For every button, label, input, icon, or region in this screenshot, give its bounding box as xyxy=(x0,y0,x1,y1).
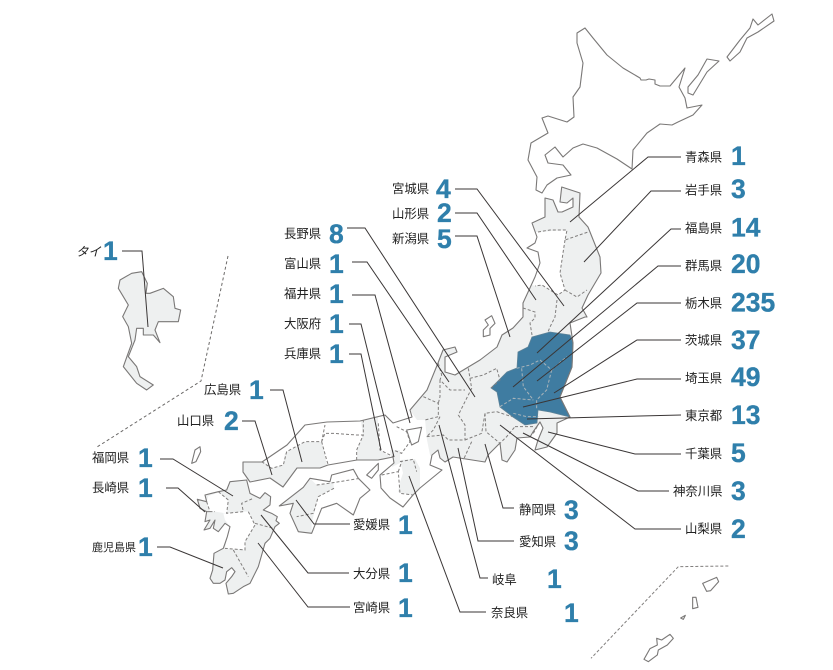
map: Okinawa islands inset xyxy=(591,566,728,662)
callout: Nagano: 長野県 xyxy=(284,227,321,241)
callout: Fukuoka xyxy=(92,443,233,496)
callout: Kagoshima xyxy=(92,532,223,568)
callout: Gifu: 1 xyxy=(547,564,562,594)
callout: Shizuoka: 静岡県 xyxy=(519,503,556,517)
callout: Nagano xyxy=(284,219,475,397)
callout: Fukui xyxy=(284,279,410,423)
callout: Ehime: 1 xyxy=(398,510,413,540)
callout: Nara xyxy=(409,476,579,628)
callout: Miyagi xyxy=(392,174,564,306)
callout: Aomori: 1 xyxy=(731,141,746,171)
callout: Thailand: タイ xyxy=(76,245,101,259)
callout: Chiba: 千葉県 xyxy=(685,447,722,461)
callout: Tochigi: 栃木県 xyxy=(685,296,722,310)
callout: Kanagawa xyxy=(523,433,746,506)
callout: Miyagi: 宮城県 xyxy=(392,181,429,196)
callout: Ibaraki: 37 xyxy=(731,325,760,355)
callout: Niigata: 新潟県 xyxy=(392,232,429,246)
callout: Kagoshima: 1 xyxy=(138,532,153,562)
callout: Chiba xyxy=(548,432,746,468)
callout: Kanagawa: 神奈川県 xyxy=(673,484,723,498)
map: Shikoku xyxy=(279,469,370,533)
callout: Yamagata xyxy=(392,198,536,300)
callout: Iwate: 岩手県 xyxy=(685,182,722,198)
callout: Tochigi xyxy=(537,288,775,381)
callout: Iwate xyxy=(584,174,746,262)
callout: Aomori: 青森県 xyxy=(685,150,722,164)
callout: Oita: 1 xyxy=(398,558,413,588)
callout: Tokyo xyxy=(527,400,760,430)
callout: Fukushima: 福島県 xyxy=(685,220,722,236)
callout: Nagano: 8 xyxy=(329,219,344,249)
callout: Tokyo: 13 xyxy=(731,400,760,430)
callout: Kagoshima: 鹿児島県 xyxy=(92,540,136,554)
callout: Yamaguchi xyxy=(177,406,272,475)
callout: Fukuoka: 福岡県 xyxy=(92,450,129,465)
callout: Aichi xyxy=(458,448,579,556)
callout: Osaka: 大阪府 xyxy=(284,317,321,331)
callout: Fukui: 1 xyxy=(329,279,344,309)
callout: Iwate: 3 xyxy=(731,174,746,204)
callout: Oita: 大分県 xyxy=(353,567,390,581)
callout: Fukushima xyxy=(537,212,761,353)
callout: Yamaguchi: 2 xyxy=(224,406,239,436)
callout: Osaka xyxy=(284,309,394,457)
callout: Miyazaki: 宮崎県 xyxy=(353,600,390,615)
callout: Miyagi: 4 xyxy=(436,174,451,204)
callout: Shizuoka: 3 xyxy=(564,495,579,525)
callout: Gunma: 20 xyxy=(731,249,760,279)
callout: Niigata: 5 xyxy=(437,224,452,254)
callout: Fukushima: 14 xyxy=(731,212,761,242)
callout: Nagasaki: 長崎県 xyxy=(92,481,129,495)
callout: Yamagata: 2 xyxy=(437,198,452,228)
callout: Ibaraki: 茨城県 xyxy=(685,334,722,348)
callout: Gunma xyxy=(513,249,760,387)
callout: Toyama xyxy=(284,249,449,382)
callout: Gunma: 群馬県 xyxy=(685,259,722,273)
callout: Miyazaki: 1 xyxy=(398,593,413,623)
map: Honshu xyxy=(243,187,601,515)
island: Tsushima xyxy=(192,447,201,463)
callout: Saitama: 埼玉県 xyxy=(685,372,722,386)
callout: Fukuoka: 1 xyxy=(138,443,153,473)
callout: Tokyo: 東京都 xyxy=(685,409,722,423)
map: Hokkaido xyxy=(528,14,774,193)
map: Kyushu xyxy=(197,480,279,594)
callout: Kanagawa: 3 xyxy=(731,476,746,506)
callout: Yamaguchi: 山口県 xyxy=(177,414,214,428)
map: Thailand xyxy=(118,272,181,390)
callout: Hyogo: 兵庫県 xyxy=(284,347,321,361)
callout: Aichi: 愛知県 xyxy=(519,535,556,549)
callout: Hyogo: 1 xyxy=(329,339,344,369)
callout: Aichi: 3 xyxy=(564,526,579,556)
callout: Thailand: 1 xyxy=(103,236,118,266)
callout: Saitama: 49 xyxy=(731,362,760,392)
callout: Yamanashi: 2 xyxy=(731,514,746,544)
callout: Osaka: 1 xyxy=(329,309,344,339)
callout: Hiroshima xyxy=(204,375,302,462)
callout: Miyazaki xyxy=(258,543,413,623)
callout: Nagasaki xyxy=(92,473,205,512)
callout: Hiroshima: 広島県 xyxy=(204,382,241,397)
callout: Thailand xyxy=(76,236,148,327)
inset divider: Thailand xyxy=(97,256,228,447)
callout: Nara: 奈良県 xyxy=(491,605,528,620)
callout: Ehime xyxy=(296,500,413,540)
callout: Niigata xyxy=(392,224,510,337)
callout: Gifu xyxy=(439,425,562,594)
callout: Toyama: 1 xyxy=(329,249,344,279)
callout: Toyama: 富山県 xyxy=(284,257,321,271)
callout: Gifu: 岐阜 xyxy=(492,572,517,587)
callout: Yamanashi: 山梨県 xyxy=(685,522,722,536)
callout: Fukui: 福井県 xyxy=(284,286,321,301)
callout: Saitama xyxy=(523,362,760,407)
callout: Nagasaki: 1 xyxy=(138,473,153,503)
callout: Shizuoka xyxy=(485,444,579,525)
callout: Aomori xyxy=(570,141,746,222)
callout: Yamanashi xyxy=(500,425,746,544)
callout: Hiroshima: 1 xyxy=(249,375,264,405)
callout: Yamagata: 山形県 xyxy=(392,207,429,221)
callout: Ehime: 愛媛県 xyxy=(353,518,390,532)
callout: Nara: 1 xyxy=(564,598,579,628)
callout: Ibaraki xyxy=(554,325,760,393)
highlighted prefectures xyxy=(491,332,573,425)
callout: Hyogo xyxy=(284,339,381,450)
callout: Oita xyxy=(261,515,413,588)
callout: Tochigi: 235 xyxy=(731,288,775,318)
callout: Chiba: 5 xyxy=(731,438,746,468)
